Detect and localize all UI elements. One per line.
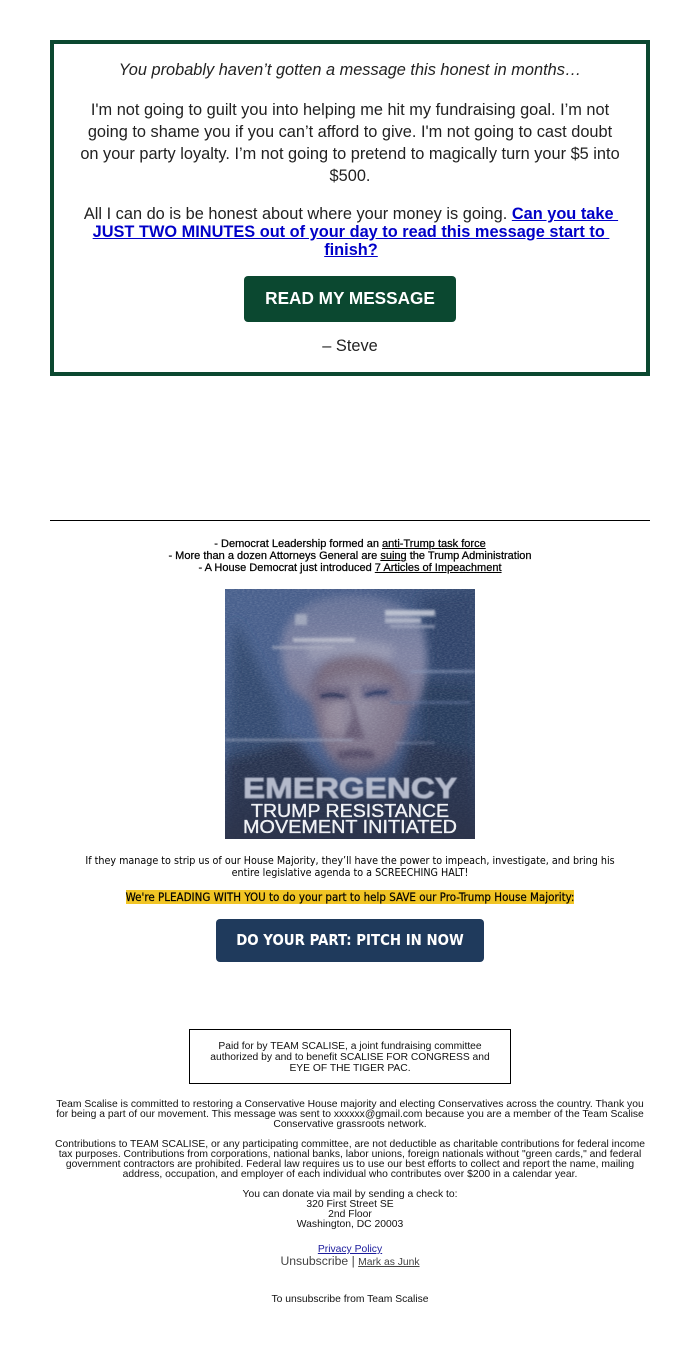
privacy link: Privacy Policy	[318, 1244, 382, 1255]
mailing address: Washington, DC 20003	[297, 1219, 403, 1230]
footer about paragraph: Conservative grassroots network.	[273, 1119, 427, 1130]
footer legal paragraph: Contributions to TEAM SCALISE, or any participating committee, are not deductible as charitable contributions for federal income	[55, 1139, 645, 1150]
signature: – Steve	[322, 337, 378, 355]
glitch streaks	[225, 610, 475, 744]
button: pitch in now: DO YOUR PART: PITCH IN NOW	[236, 931, 464, 949]
footer about paragraph: Team Scalise is committed to restoring a Conservative House majority and electing Conservatives across the country. Thank you	[56, 1099, 644, 1110]
warning paragraph	[85, 854, 615, 879]
warning paragraph: entire legislative agenda to a SCREECHING HALT!	[232, 866, 468, 879]
footer legal paragraph	[55, 1139, 645, 1180]
image headline: MOVEMENT INITIATED	[243, 817, 457, 837]
footer about paragraph	[56, 1099, 644, 1130]
mailing address: 320 First Street SE	[306, 1199, 394, 1210]
disclaimer box: authorized by and to benefit SCALISE FOR CONGRESS and	[210, 1052, 490, 1063]
image headline	[243, 773, 457, 837]
bullet list of Democrat actions: - More than a dozen Attorneys General are suing the Trump Administration	[168, 550, 532, 562]
unsubscribe note: To unsubscribe from Team Scalise	[271, 1294, 429, 1305]
call to read paragraph: JUST TWO MINUTES out of your day to read this message start to	[93, 223, 605, 241]
image: glitched emergency portrait	[225, 589, 475, 839]
mailing address: 2nd Floor	[328, 1209, 372, 1220]
unsubscribe links: Unsubscribe | Mark as Junk	[280, 1254, 420, 1268]
warning paragraph: If they manage to strip us of our House Majority, they’ll have the power to impeach, investigate, and bring his	[85, 854, 615, 867]
call to read paragraph	[84, 205, 618, 259]
disclaimer box: Paid for by TEAM SCALISE, a joint fundraising committee	[218, 1041, 482, 1052]
image headline: EMERGENCY	[243, 773, 457, 805]
button: read my message: READ MY MESSAGE	[265, 288, 435, 308]
bullet list of Democrat actions	[168, 538, 532, 574]
highlighted plea: We're PLEADING WITH YOU to do your part to help SAVE our Pro-Trump House Majority:	[126, 890, 574, 904]
button: read my message	[244, 276, 456, 322]
mailing address	[242, 1189, 457, 1230]
body paragraph: $500.	[330, 167, 370, 185]
intro heading: You probably haven’t gotten a message this honest in months…	[119, 61, 581, 79]
footer legal paragraph: government contractors are prohibited. Federal law requires us to use our best efforts to collect and report the name, mailing	[66, 1159, 634, 1170]
panel: honest message	[50, 40, 650, 376]
image headline: TRUMP RESISTANCE	[251, 801, 449, 821]
body paragraph: I'm not going to guilt you into helping me hit my fundraising goal. I’m not	[91, 101, 609, 119]
hair and head	[281, 595, 427, 774]
footer about paragraph: for being a part of our movement. This message was sent to xxxxxx@gmail.com because you are a member of the Team Scalise	[56, 1109, 644, 1120]
button: pitch in now	[216, 919, 484, 962]
footer legal paragraph: tax purposes. Contributions from corporations, national banks, labor unions, foreign nationals without "green cards," and federal	[59, 1149, 641, 1160]
bullet list of Democrat actions: - A House Democrat just introduced 7 Articles of Impeachment	[198, 562, 502, 574]
disclaimer box: EYE OF THE TIGER PAC.	[289, 1063, 411, 1074]
body paragraph: going to shame you if you can’t afford to give. I'm not going to cast doubt	[88, 123, 612, 141]
call to read paragraph: finish?	[324, 241, 378, 259]
disclaimer box	[189, 1029, 511, 1084]
call to read paragraph: All I can do is be honest about where your money is going. Can you take	[84, 205, 614, 223]
footer legal paragraph: address, occupation, and employer of each individual who contributes over $200 in a calendar year.	[123, 1169, 577, 1180]
facial features	[317, 685, 393, 759]
bullet list of Democrat actions: - Democrat Leadership formed an anti-Trump task force	[214, 538, 486, 550]
body paragraph	[80, 101, 620, 185]
body paragraph: on your party loyalty. I’m not going to pretend to magically turn your $5 into	[80, 145, 620, 163]
mailing address: You can donate via mail by sending a check to:	[243, 1189, 457, 1200]
